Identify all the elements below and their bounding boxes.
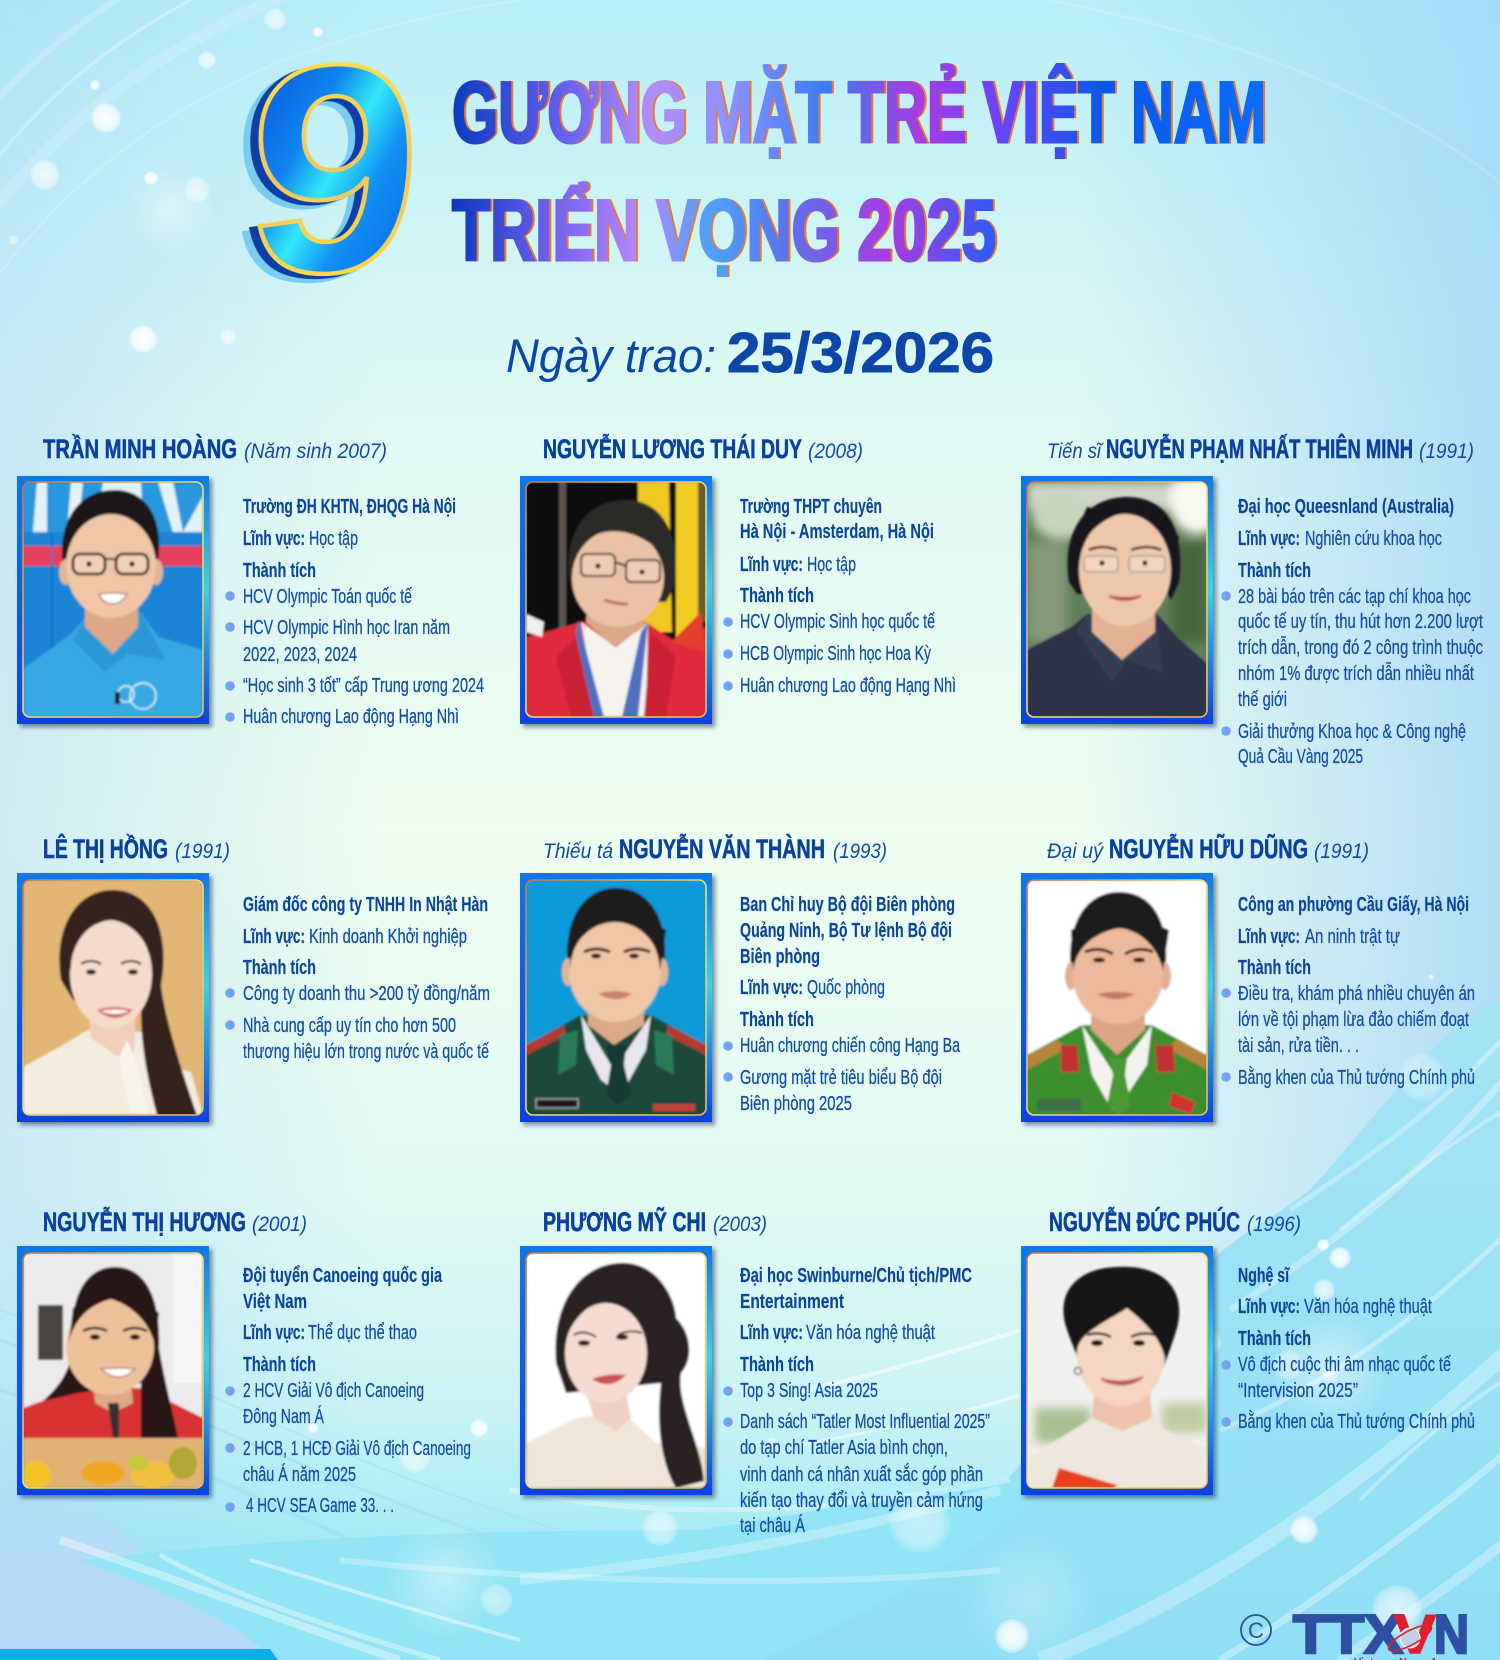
photo [520, 476, 712, 724]
name heading: Tiến sĩ [1047, 440, 1104, 463]
title [452, 65, 1266, 279]
achievements: Thành tích [740, 585, 814, 607]
name heading: (2003) [713, 1213, 767, 1236]
field: Lĩnh vực: [1238, 528, 1300, 550]
panel: Phương Mỹ Chi [520, 1206, 990, 1537]
field: Lĩnh vực: [740, 977, 803, 999]
achievements: 4 HCV SEA Game 33. . . [246, 1495, 394, 1517]
workplace: Đội tuyển Canoeing quốc gia [243, 1265, 443, 1287]
name heading: NGUYỄN HỮU DŨNG [1109, 833, 1308, 864]
field: Lĩnh vực: [1238, 926, 1300, 948]
photo [17, 1246, 209, 1495]
achievements: tại châu Á [740, 1514, 805, 1537]
workplace: Việt Nam [243, 1291, 307, 1313]
panel: Nguyễn Đức Phúc [1021, 1206, 1475, 1495]
name heading: (1991) [1419, 440, 1474, 463]
title: TRIỂN VỌNG 2025 [452, 183, 996, 279]
workplace: Entertainment [740, 1291, 844, 1313]
achievements: Thành tích [1238, 560, 1311, 582]
achievements: Huân chương Lao động Hạng Nhì [740, 675, 956, 697]
achievements: Huân chương Lao động Hạng Nhì [243, 706, 459, 728]
achievements: Thành tích [740, 1354, 814, 1376]
panel: Nguyễn Văn Thành [520, 833, 961, 1122]
achievements: Thành tích [243, 957, 316, 979]
achievements: HCV Olympic Toán quốc tế [243, 586, 412, 608]
achievements: Biên phòng 2025 [740, 1093, 852, 1115]
achievements: HCB Olympic Sinh học Hoa Kỳ [740, 643, 931, 665]
achievements: “Học sinh 3 tốt” cấp Trung ương 2024 [243, 675, 484, 697]
field: Thể dục thể thao [308, 1322, 417, 1344]
workplace: Đại học Swinburne/Chủ tịch/PMC [740, 1265, 972, 1287]
field: Lĩnh vực: [243, 1322, 305, 1344]
achievements: 2 HCV Giải Vô địch Canoeing [243, 1380, 424, 1402]
panel: Trần Minh Hoàng [17, 433, 484, 728]
achievements: Thành tích [740, 1009, 814, 1031]
name heading: (Năm sinh 2007) [244, 440, 387, 463]
workplace: Trường THPT chuyên [740, 496, 882, 518]
achievements: 2 HCB, 1 HCĐ Giải Vô địch Canoeing [243, 1438, 471, 1460]
achievements [225, 957, 490, 1063]
achievements [225, 560, 484, 728]
workplace [740, 894, 955, 968]
achievements: Quả Cầu Vàng 2025 [1238, 746, 1363, 768]
achievements: “Intervision 2025” [1238, 1380, 1358, 1402]
achievements: Gương mặt trẻ tiêu biểu Bộ đội [740, 1067, 942, 1089]
name heading: Đại uý [1047, 840, 1104, 863]
photo [1021, 1246, 1213, 1495]
name heading: (2001) [252, 1213, 307, 1236]
workplace [243, 1265, 443, 1313]
field: Văn hóa nghệ thuật [806, 1322, 935, 1344]
field: An ninh trật tự [1305, 926, 1400, 948]
workplace [740, 1265, 972, 1313]
name heading: NGUYỄN VĂN THÀNH [619, 833, 825, 864]
panel: Nguyễn Thị Hương [17, 1206, 471, 1517]
achievements: thương hiệu lớn trong nước và quốc tế [243, 1041, 489, 1063]
name heading: (2008) [808, 440, 863, 463]
achievements: Đông Nam Á [243, 1405, 324, 1428]
achievements: HCV Olympic Sinh học quốc tế [740, 611, 935, 633]
achievements: Thành tích [243, 1354, 316, 1376]
achievements [723, 1009, 961, 1115]
achievements: kiến tạo thay đổi và truyền cảm hứng [740, 1490, 983, 1512]
achievements: Công ty doanh thu >200 tỷ đồng/năm [243, 983, 490, 1005]
workplace: Biên phòng [740, 946, 820, 968]
logo: TTXVN: C [1248, 1618, 1264, 1643]
field [243, 1322, 417, 1344]
field: Kinh doanh Khởi nghiệp [309, 926, 467, 948]
bottom-left blue bar [0, 1649, 278, 1660]
field [1238, 926, 1400, 948]
panel: Lê Thị Hồng [17, 833, 490, 1122]
achievements: do tạp chí Tatler Asia bình chọn, [740, 1437, 948, 1459]
photo [520, 873, 712, 1122]
achievements [1221, 957, 1475, 1089]
field [1238, 1296, 1432, 1318]
name heading: NGUYỄN ĐỨC PHÚC [1049, 1206, 1240, 1237]
name heading: NGUYỄN THỊ HƯƠNG [43, 1206, 246, 1237]
field: Lĩnh vực: [1238, 1296, 1300, 1318]
photo [17, 873, 209, 1122]
photo [17, 476, 209, 724]
achievements [723, 585, 956, 697]
achievements: Huân chương chiến công Hạng Ba [740, 1035, 961, 1057]
photo [520, 1246, 712, 1495]
field: Nghiên cứu khoa học [1305, 528, 1442, 550]
achievements [723, 1354, 990, 1537]
achievements: HCV Olympic Hình học Iran năm [243, 617, 450, 639]
name heading: NGUYỄN LƯƠNG THÁI DUY [543, 433, 802, 464]
achievements: Thành tích [1238, 1328, 1311, 1350]
name heading: (1996) [1247, 1213, 1301, 1236]
field: Học tập [309, 528, 358, 550]
achievements: châu Á năm 2025 [243, 1463, 356, 1486]
panel: Nguyễn Phạm Nhất Thiên Minh [1021, 433, 1483, 768]
big number 9: 9 [240, 3, 429, 334]
field [740, 977, 885, 999]
workplace [740, 496, 934, 543]
achievements [1221, 560, 1483, 768]
achievements: thế giới [1238, 689, 1287, 711]
name heading: (1993) [833, 840, 887, 863]
photo [1021, 873, 1213, 1122]
workplace: Quảng Ninh, Bộ Tư lệnh Bộ đội [740, 920, 952, 942]
panel: Nguyễn Hữu Dũng [1021, 833, 1475, 1122]
name heading: Thiếu tá [543, 840, 613, 863]
achievements: 2022, 2023, 2024 [243, 644, 357, 666]
field: Lĩnh vực: [740, 1322, 803, 1344]
field: Quốc phòng [807, 977, 885, 999]
achievements: Danh sách “Tatler Most Influential 2025” [740, 1411, 990, 1433]
achievements: tài sản, rửa tiền. . . [1238, 1035, 1359, 1057]
field [243, 926, 467, 948]
field [1238, 528, 1442, 550]
field [740, 1322, 935, 1344]
field: Học tập [807, 554, 856, 576]
name heading: TRẦN MINH HOÀNG [43, 433, 237, 464]
workplace: Trường ĐH KHTN, ĐHQG Hà Nội [243, 496, 456, 518]
panel: Nguyễn Lương Thái Duy [520, 433, 956, 724]
award date [506, 321, 994, 385]
field: Lĩnh vực: [243, 926, 305, 948]
achievements [225, 1354, 471, 1517]
achievements: vinh danh cá nhân xuất sắc góp phần [740, 1463, 983, 1486]
workplace: Hà Nội - Amsterdam, Hà Nội [740, 521, 934, 543]
workplace: Nghệ sĩ [1238, 1265, 1290, 1287]
name heading: PHƯƠNG MỸ CHI [543, 1206, 706, 1237]
achievements [1221, 1328, 1475, 1433]
name heading: (1991) [1314, 840, 1369, 863]
field: Lĩnh vực: [243, 528, 305, 550]
name heading: LÊ THỊ HỒNG [43, 833, 168, 864]
award date: 25/3/2026 [727, 321, 994, 385]
field: Lĩnh vực: [740, 554, 803, 576]
workplace: Giám đốc công ty TNHH In Nhật Hàn [243, 894, 488, 916]
award date: Ngày trao: [506, 329, 716, 382]
workplace: Ban Chỉ huy Bộ đội Biên phòng [740, 894, 955, 916]
photo [1021, 466, 1225, 724]
field: Văn hóa nghệ thuật [1304, 1296, 1432, 1318]
achievements: Top 3 Sing! Asia 2025 [740, 1380, 878, 1402]
achievements: Nhà cung cấp uy tín cho hơn 500 [243, 1015, 456, 1037]
achievements: Thành tích [243, 560, 316, 582]
achievements: Thành tích [1238, 957, 1311, 979]
logo: TTXVN [1241, 1603, 1469, 1660]
name heading: (1991) [175, 840, 230, 863]
